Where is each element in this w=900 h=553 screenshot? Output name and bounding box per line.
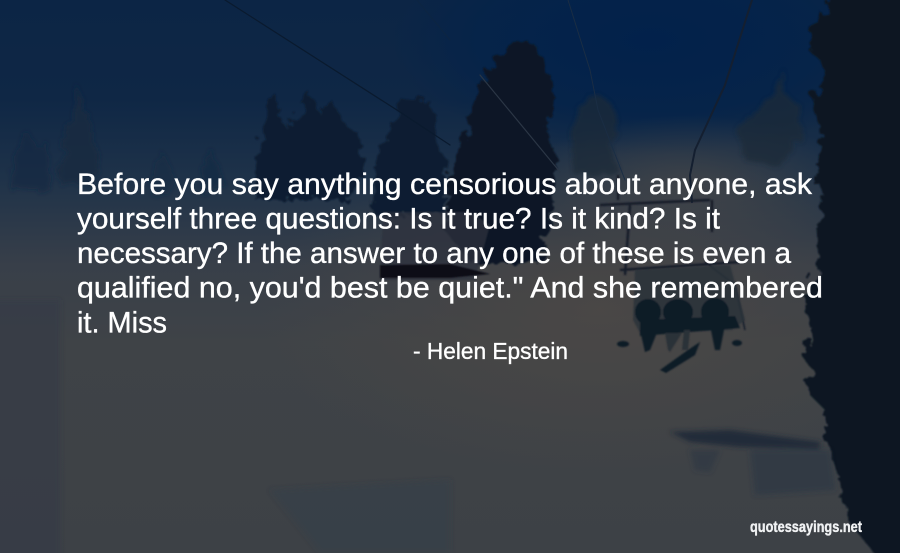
watermark: quotessayings.net (750, 519, 863, 536)
chairlift, far (380, 175, 745, 330)
center dark tree (445, 40, 558, 262)
quote text (77, 168, 823, 340)
quote text: necessary? If the answer to any one of these is even a (77, 237, 791, 270)
fog trees in the distance (570, 65, 802, 175)
quote text: qualified no, you'd best be quiet." And she remembered (77, 272, 823, 304)
snow shadows (0, 300, 835, 553)
quote text: Before you say anything censorious about anyone, ask (77, 168, 813, 201)
quote text: yourself three questions: Is it true? Is it kind? Is it (77, 202, 721, 236)
left tree line (10, 85, 225, 195)
mid tree group (255, 92, 446, 215)
right dark tree (800, 0, 900, 553)
quote text: it. Miss (77, 306, 167, 340)
chairlift with riders (617, 265, 745, 373)
author attribution: - Helen Epstein (413, 338, 568, 364)
lift cables (225, 0, 752, 202)
